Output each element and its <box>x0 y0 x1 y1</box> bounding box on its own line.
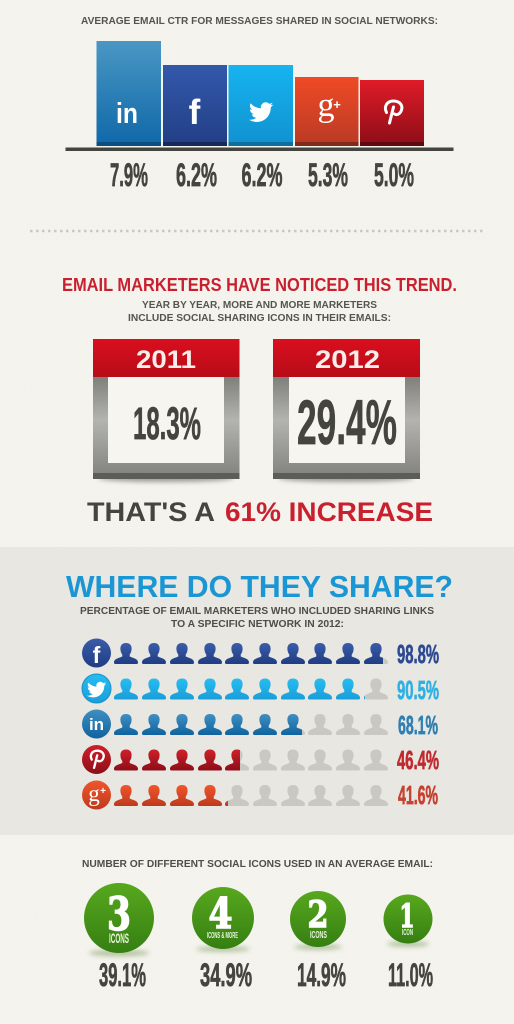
badge: 2 icons <box>290 891 346 950</box>
row: Google+ 41.6%: + <box>100 786 106 797</box>
card: 2012: 2012 <box>315 346 380 374</box>
badge: 3 icons: ICONS <box>109 930 129 946</box>
section: where do they share <box>66 569 453 810</box>
value: 3 icons: 39.1% <box>99 957 146 993</box>
heading: where: WHERE DO THEY SHARE? <box>66 569 453 604</box>
section: marketers trend <box>62 275 457 527</box>
row: LinkedIn 68.1% <box>82 710 438 740</box>
card: 2011 <box>93 339 240 482</box>
card: 2011: 2011 <box>136 346 196 374</box>
card: 2012: 29.4% <box>297 388 397 458</box>
row: Twitter 90.5%: 90.5% <box>397 675 439 705</box>
heading: CTR: AVERAGE EMAIL CTR FOR MESSAGES SHARED IN SOCIAL NETWORKS: <box>81 16 438 27</box>
badge: 2 icons: ICONS <box>310 930 327 941</box>
subheading: trend: YEAR BY YEAR, MORE AND MORE MARKETERS <box>142 300 377 311</box>
row: LinkedIn 68.1%: 68.1% <box>398 710 438 740</box>
badge: 4 icons and more: 4 <box>208 889 232 938</box>
callout: 61% increase <box>87 497 433 527</box>
axis line <box>66 148 454 151</box>
card: 2011: 18.3% <box>133 398 201 449</box>
bar: Facebook: f <box>189 93 201 132</box>
bar: Facebook <box>163 65 227 146</box>
subheading: where: PERCENTAGE OF EMAIL MARKETERS WHO INCLUDED SHARING LINKS <box>80 606 434 617</box>
row: Twitter 90.5% <box>82 674 439 705</box>
row: Facebook 98.8%: 98.8% <box>397 639 439 669</box>
badge: 4 icons and more <box>192 887 254 952</box>
row: Pinterest 46.4%: 46.4% <box>397 745 439 775</box>
subheading: trend: INCLUDE SOCIAL SHARING ICONS IN THEIR EMAILS: <box>128 313 391 324</box>
value: Google+: 5.3% <box>308 157 348 193</box>
callout: 61% increase: THAT'S A <box>87 497 215 527</box>
value: Pinterest: 5.0% <box>374 157 414 193</box>
section: average email CTR <box>66 16 454 193</box>
section: number of icons <box>82 859 433 993</box>
bar: Google+: g <box>318 87 334 124</box>
badge: 1 icon <box>384 894 432 947</box>
value: 4 icons: 34.9% <box>200 957 252 993</box>
badge: 3 icons <box>84 883 154 956</box>
badge: 2 icons: 2 <box>308 894 328 936</box>
badge: 4 icons and more: ICONS & MORE <box>207 931 238 940</box>
value: 2 icons: 14.9% <box>297 957 346 993</box>
row: Google+ 41.6%: 41.6% <box>398 780 438 810</box>
badge: 3 icons: 3 <box>107 887 131 941</box>
subheading: trend <box>128 300 391 324</box>
shaded section band <box>0 547 514 835</box>
bar: LinkedIn: in <box>116 98 138 130</box>
subheading: where: TO A SPECIFIC NETWORK IN 2012: <box>171 619 344 630</box>
row: Google+ 41.6%: g <box>88 781 100 806</box>
callout: 61% increase: 61% INCREASE <box>225 497 433 527</box>
heading: trend: EMAIL MARKETERS HAVE NOTICED THIS TREND. <box>62 275 457 295</box>
bar: Pinterest <box>360 80 424 146</box>
badge: 1 icon: 1 <box>400 897 414 935</box>
bar: Google+: + <box>333 97 341 112</box>
badge: 1 icon: ICON <box>402 928 413 937</box>
row: Facebook 98.8% <box>82 638 439 669</box>
value: 1 icon: 11.0% <box>388 957 433 993</box>
row: Facebook 98.8%: f <box>93 642 101 668</box>
value: Twitter: 6.2% <box>242 157 282 193</box>
bar: LinkedIn <box>96 41 161 146</box>
value: LinkedIn: 7.9% <box>110 157 148 193</box>
row: LinkedIn 68.1%: in <box>89 715 104 734</box>
value: Facebook: 6.2% <box>176 157 217 193</box>
heading: number of icons: NUMBER OF DIFFERENT SOCIAL ICONS USED IN AN AVERAGE EMAIL: <box>82 859 433 870</box>
card: 2012 <box>273 339 420 482</box>
bar: Google+ <box>295 77 358 146</box>
row: Google+ 41.6% <box>82 780 438 810</box>
bar: Twitter <box>228 65 293 146</box>
dotted separator <box>30 230 484 232</box>
subheading: where <box>80 606 434 630</box>
row: Pinterest 46.4% <box>82 745 439 775</box>
